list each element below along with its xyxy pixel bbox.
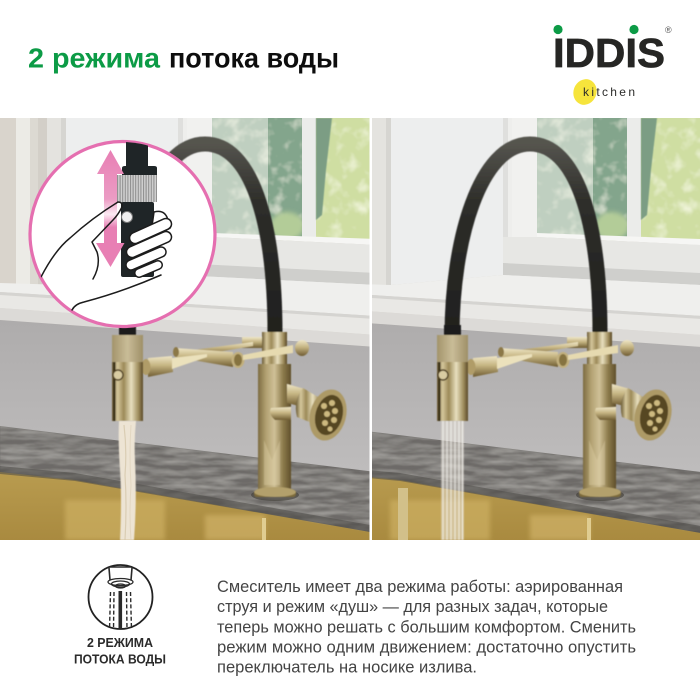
title <box>28 42 339 74</box>
thumb and palm <box>41 202 122 279</box>
faucet head body <box>121 202 154 277</box>
callout circle <box>30 142 215 326</box>
logo kitchen word: kitchen <box>583 85 635 99</box>
photo: left faucet, aerated stream <box>0 118 370 540</box>
logo: IDDIS kitchen <box>553 25 672 108</box>
water stream: shower <box>441 421 464 540</box>
title: потока воды <box>169 42 339 74</box>
registered mark: ® <box>665 25 672 35</box>
faucet head hose <box>126 142 148 166</box>
photo: right faucet, shower stream <box>372 118 700 540</box>
logo wordmark: IDDIS <box>553 30 665 76</box>
lower palm <box>72 275 161 310</box>
logo green dots <box>553 25 639 34</box>
faucet head knurled ring <box>117 175 157 202</box>
title: 2 режима <box>28 42 161 74</box>
description text: струя и режим «душ» — для разных задач, которые <box>217 598 608 616</box>
fingers <box>131 211 170 273</box>
description text: теперь можно решать с большим комфортом. Сменить <box>217 618 636 636</box>
switch button <box>122 212 132 222</box>
logo yellow spot <box>570 76 600 108</box>
icon caption: 2 РЕЖИМА <box>87 635 154 650</box>
icon aerator <box>108 567 133 588</box>
icon central jet <box>118 591 122 631</box>
sink reflection bar <box>398 488 408 540</box>
water stream: aerated <box>119 421 136 540</box>
description text: переключатель на носике излива. <box>217 658 477 676</box>
description text: режим можно одним движением: достаточно опустить <box>217 638 636 656</box>
icon ring <box>88 565 152 629</box>
description text <box>217 578 636 676</box>
faucet head collar <box>122 166 157 176</box>
description text: Смеситель имеет два режима работы: аэрированная <box>217 578 623 596</box>
callout: hand on switch <box>30 130 215 326</box>
icon: two flow modes <box>74 565 166 666</box>
up-down arrow <box>96 150 124 267</box>
icon shower drops <box>110 592 132 630</box>
icon: two flow modes: ПОТОКА ВОДЫ <box>74 652 166 666</box>
